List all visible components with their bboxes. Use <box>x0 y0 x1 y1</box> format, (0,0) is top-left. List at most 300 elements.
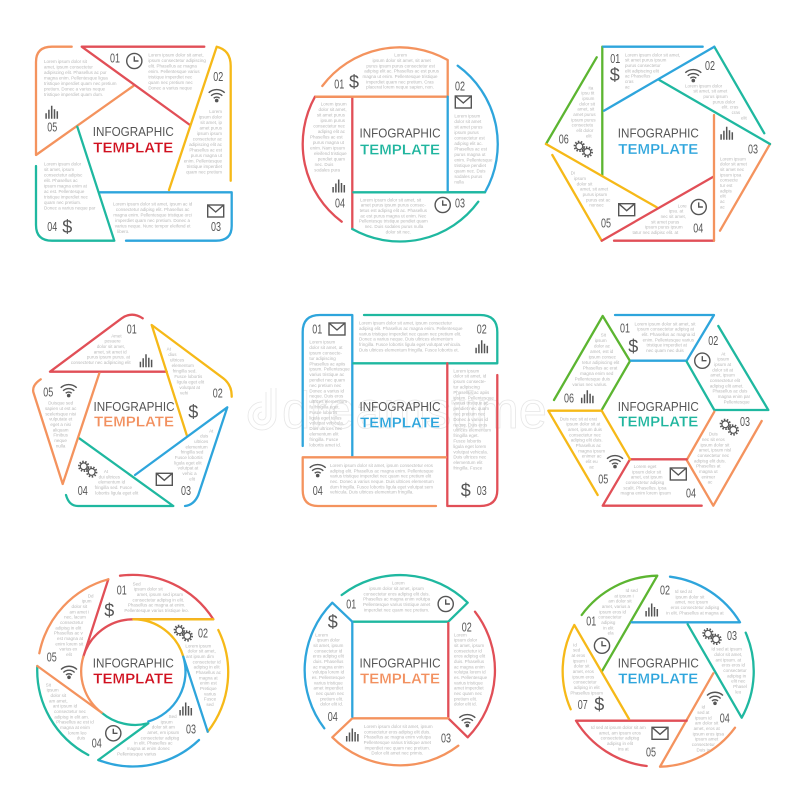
segment 03 blue: in elit. Phasellus ac <box>134 741 173 746</box>
segment 04 teal: quam nec pretium. <box>44 200 81 205</box>
segment 04 teal: elementum id <box>98 480 126 485</box>
segment 02 teal: Phasellus ac duis <box>713 389 748 394</box>
segment 06 green <box>546 47 602 175</box>
segment 01 blue: nec quam nec duis <box>646 348 685 353</box>
segment 05 orange: sapien ut est ac <box>45 406 77 411</box>
segment 04 orange: Lorem ipsum dolor sit amet, ipsum consectetur eros <box>330 463 434 468</box>
segment 02 yellow: sit amet, ip <box>200 120 222 125</box>
segment 02 yellow: vehi <box>180 391 188 396</box>
segment 03 blue <box>98 657 208 766</box>
segment 02 blue: dolor sit amet <box>454 119 482 124</box>
segment 01 blue: elit. Phasellus ac magna id <box>642 332 695 337</box>
segment 04 teal: fringilla sed. Fusce <box>95 485 133 490</box>
segment 01 green <box>582 576 657 672</box>
segment 03 teal: ant ipsum. at <box>715 657 742 662</box>
title: TEMPLATE <box>93 670 173 687</box>
segment 01 blue: Phasellus ac apiis <box>309 361 346 366</box>
segment 05 yellow: dolor sit <box>577 181 593 186</box>
segment 01 teal: 01 <box>346 597 356 612</box>
segment 05 orange: est magna at <box>57 636 84 641</box>
segment 06 green: dolor ac <box>594 343 611 348</box>
segment 04 orange: ipsum eros ipsa <box>693 731 725 736</box>
title: INFOGRAPHIC <box>93 124 174 139</box>
segment 02 blue: ipsum dolor sit <box>676 594 705 599</box>
segment 02 yellow: dolor sit amet, <box>188 649 216 654</box>
segment 02 teal: purus dolor <box>713 99 736 104</box>
title: INFOGRAPHIC <box>360 126 440 141</box>
segment 04 blue <box>305 603 352 728</box>
segment 03 blue: consectetur adipisg elit. Phasellus ac <box>116 207 190 212</box>
segment 03 teal: consectetur <box>723 668 747 673</box>
segment 04 red <box>303 97 352 229</box>
segment 05 yellow: magna ipsum <box>578 448 605 453</box>
segment 01 green: adipisg <box>601 620 616 625</box>
segment 04 teal: ac est. Pellentesque <box>44 189 85 194</box>
segment 06 green: Pellentesque duis <box>575 376 611 381</box>
segment 04 teal: consectetur adipisc <box>44 172 83 177</box>
segment 03 teal: 03 <box>455 195 465 210</box>
segment 03 orange: 03 <box>740 414 750 429</box>
title: INFOGRAPHIC <box>618 656 699 671</box>
segment 03 orange: sit amet nec <box>720 167 745 172</box>
segment 01 blue: purus consectetur <box>625 63 661 68</box>
segment 06 green: Phasellus ac erat <box>583 365 618 370</box>
segment 01 green: in elit <box>603 625 614 630</box>
segment 04 blue: dolor elit id. <box>320 702 343 707</box>
segment 01 red: enim. Pellentesque varius <box>148 69 200 74</box>
segment 02 yellow: magna at <box>199 675 218 680</box>
segment 06 green: varius nec varius. <box>572 382 607 387</box>
title: INFOGRAPHIC <box>618 126 699 141</box>
segment 02 blue: Phasellus ac est <box>454 147 488 152</box>
panel: circle with arrow square four segments <box>305 575 495 765</box>
segment 04 teal: am amet, <box>49 698 68 703</box>
segment 05 orange: pretium. Donec a varius neque <box>44 86 106 91</box>
title: INFOGRAPHIC <box>93 656 174 671</box>
segment 04 red: Lorem eget <box>634 464 657 469</box>
segment 04 teal: magna at enim <box>60 725 90 730</box>
segment 02 red <box>448 612 495 737</box>
segment 01 blue <box>615 315 714 361</box>
segment 03 orange <box>687 412 762 506</box>
segment 03 teal: Phasel <box>733 684 747 689</box>
segment 02 red: ipsum dolor <box>454 638 478 643</box>
segment 02 blue: amet, nec ipsum <box>675 600 708 605</box>
panel: rounded pentagon five segments <box>33 315 232 506</box>
segment 01 red: elit. Phasellus ac magna <box>148 63 197 68</box>
segment 05 orange: varius ex <box>59 647 78 652</box>
segment 05 orange: 05 <box>47 650 57 665</box>
segment 01 blue: tur adipiscing <box>309 356 336 361</box>
segment 03 orange: enimer <box>701 474 716 479</box>
segment 02 yellow: Phasellus ac <box>196 670 222 675</box>
segment 03 orange: consectetur nec <box>697 453 730 458</box>
segment 01 blue: pendiet nec quam <box>309 377 345 382</box>
title: TEMPLATE <box>360 141 440 158</box>
segment 04 red: eleifend tristique <box>314 151 347 156</box>
segment 06 green: Ita <box>588 85 594 90</box>
segment 01 green: at ipsum i <box>614 593 634 598</box>
segment 04 red: consectetur nec <box>313 123 346 128</box>
segment 04 red: nec sit amet, <box>661 214 686 219</box>
segment 01 red: $ <box>104 600 114 620</box>
segment 03 blue: 03 <box>186 721 196 736</box>
segment 02 red: 02 <box>462 620 472 635</box>
title: TEMPLATE <box>618 670 698 687</box>
title: TEMPLATE <box>94 414 174 431</box>
segment 05 orange: amet, ipsum consectetur <box>44 64 93 69</box>
segment 03 teal: leo <box>735 689 742 694</box>
segment 01 blue: ligula eget tellus <box>309 415 342 420</box>
title <box>360 656 440 687</box>
segment 05 orange: Phasellus ac v <box>54 631 84 636</box>
segment 02 yellow: ligula eget elit <box>177 380 205 385</box>
segment 04 teal: duis <box>77 736 86 741</box>
segment 02 teal: magna enim par <box>718 394 751 399</box>
segment 02 blue <box>448 66 498 192</box>
segment 03 blue <box>135 407 227 506</box>
segment 01 blue: neque. Duis eros <box>309 394 344 399</box>
segment 03 red: fringilla eget. <box>453 433 479 438</box>
segment 02 teal: ipsum at <box>714 362 732 367</box>
segment 03 teal: Id sed at ipsum <box>711 647 742 652</box>
segment 04 orange: ipsum id <box>695 715 712 720</box>
segment 01 blue: Lorem ipsum <box>309 340 336 345</box>
segment 04 teal: Lorem ipsum dolor <box>44 161 82 166</box>
segment 06 green: ipsum purus <box>571 117 596 122</box>
segment 02 teal: At <box>721 351 726 356</box>
segment 01 orange: magna ut enim. Pellentesque tristique <box>362 74 438 79</box>
title: TEMPLATE <box>360 414 440 431</box>
segment 04 teal <box>66 438 173 506</box>
segment 01 green: Id sed <box>626 588 638 593</box>
segment 04 red: magna enim lorem ipsum <box>620 491 671 496</box>
segment 01 blue: 01 <box>610 51 620 66</box>
segment 05 yellow <box>546 144 657 241</box>
segment 03 teal: ac est purus magna ut enim. Nec <box>360 213 427 218</box>
segment 03 red: nec pretium nec <box>453 412 486 417</box>
segment 01 blue: Fusce lobortis <box>309 410 338 415</box>
segment 04 teal: dui ultrices <box>99 474 121 479</box>
segment 03 orange: nec sit eros <box>702 437 726 442</box>
segment 01 teal: ipsum dolor sit amet, ipsum <box>369 586 424 591</box>
segment 04 blue: duis. Phasellus <box>313 659 344 664</box>
segment 01 teal: consectetur eros adipisg elit duis. <box>363 591 430 596</box>
segment 03 red: dolor sit amet, id <box>453 374 487 379</box>
segment 03 red: Fusce lobortis <box>453 439 482 444</box>
segment 01 blue: sit amet purus ipsum <box>625 58 667 63</box>
segment 05 orange: aliquam <box>53 427 69 432</box>
segment 01 blue: 01 <box>312 321 322 336</box>
segment 03 orange: ac <box>720 199 725 204</box>
segment 04 teal: At <box>104 469 109 474</box>
segment 05 orange: enim lorem sit <box>55 641 84 646</box>
segment 05 yellow: 05 <box>601 215 611 230</box>
segment 03 blue: ipsum <box>161 719 173 724</box>
segment 02 yellow: Fusce <box>204 697 217 702</box>
segment 05 red: consectetur adipisg <box>601 736 640 741</box>
segment 02 teal: sit amet, sit amet <box>693 89 728 94</box>
segment 05 yellow: consectetur nec <box>569 432 602 437</box>
segment 05 orange <box>36 47 133 155</box>
segment 01 red: 01 <box>110 50 120 65</box>
segment 05 red: Id sed at ipsum dolor sit am <box>591 725 646 730</box>
segment 07 yellow: adipisg in elit <box>574 685 600 690</box>
segment 04 red: tatur nec adipisc elit. at <box>632 230 679 235</box>
segment 03 blue: elit <box>189 476 196 481</box>
segment 04 red: dolor sit amet, <box>318 107 347 112</box>
segment 06 green: elit <box>586 133 592 138</box>
segment 07 yellow: at eros <box>571 653 586 658</box>
segment 03 blue: libero. <box>117 229 129 234</box>
segment 01 red <box>82 47 206 125</box>
segment 06 green: amet, est id <box>590 349 614 354</box>
segment 02 yellow: fringilla sed. <box>173 369 197 374</box>
segment 03 orange: ac <box>708 480 713 485</box>
segment 05 orange: dolor sit <box>71 604 88 609</box>
segment 03 teal: eros eros id <box>722 663 746 668</box>
segment 05 orange: adipisg in elit <box>55 625 82 630</box>
segment 04 blue: pretium elit. <box>320 696 343 701</box>
segment 03 blue <box>100 192 232 241</box>
segment 01 green: consectetur <box>598 615 622 620</box>
segment 03 orange: amet, ipsum nisl <box>699 448 731 453</box>
segment 01 green: am dolor sit <box>608 599 632 604</box>
segment 02 yellow: adipiscing elit ac <box>189 142 223 147</box>
segment 01 orange: $ <box>349 72 359 92</box>
segment 04 teal: Donec a varius neque par <box>44 205 96 210</box>
panel: rounded square five segments <box>36 47 232 241</box>
segment 02 teal: consectetur elit <box>710 378 741 383</box>
title <box>94 399 174 431</box>
segment 04 teal <box>36 127 114 241</box>
segment 02 yellow <box>169 47 231 190</box>
segment 03 blue: dolor sit am <box>152 725 175 730</box>
segment 04 red <box>602 177 714 241</box>
segment 03 orange: Phasellus ac magna enim volutpa <box>364 735 431 740</box>
segment 04 red: 04 <box>335 196 345 211</box>
segment 05 yellow: ac <box>589 464 595 469</box>
segment 05 yellow: ipsum dolor sit at <box>566 422 601 427</box>
segment 03 orange: 03 <box>441 730 451 745</box>
segment 03 red: ultrices elementum <box>453 428 491 433</box>
segment 02 blue: consectetur est <box>454 136 485 141</box>
segment 01 blue: Donec a varius id <box>309 388 344 393</box>
segment 03 red: neque. Duis eros <box>453 422 488 427</box>
segment 02 yellow: Phasellus ac est <box>189 147 223 152</box>
segment 01 blue: varius tristique ac <box>309 372 345 377</box>
segment 01 orange: ipsum dolor sit amet, sit amet <box>372 58 432 63</box>
segment 06 green: amet purus <box>573 112 596 117</box>
segment 01 orange: adipisg elit ac. Phasellus ac est purus <box>364 69 440 74</box>
segment 04 orange: dum fringilla. Fusce lobortis ligula eget volutpat sem <box>330 484 433 489</box>
segment 03 orange: Lorem ipsum dolor sit amet, ipsum <box>364 724 433 729</box>
panel: circle with central square four segments <box>303 47 498 242</box>
segment 03 blue: volutpat at <box>178 466 199 471</box>
segment 05 orange: elit <box>66 652 73 657</box>
segment 05 orange <box>37 579 108 713</box>
segment 03 orange: dolor sit amet <box>720 162 748 167</box>
segment 04 orange: am dolor sit <box>695 721 719 726</box>
segment 05 yellow: 05 <box>598 471 608 486</box>
segment 03 red: Lorem ipsum <box>453 368 480 373</box>
segment 04 blue: 04 <box>328 709 338 724</box>
title: INFOGRAPHIC <box>360 656 440 671</box>
title <box>618 126 699 158</box>
segment 02 yellow: varius <box>204 691 217 696</box>
segment 01 blue: 01 <box>620 320 630 335</box>
segment 03 orange: magna ut <box>699 469 718 474</box>
segment 03 blue: 03 <box>211 219 221 234</box>
segment 02 yellow <box>152 325 232 435</box>
segment 04 orange: nec. Donec a varius neque. Duis ultrices elementum <box>330 479 434 484</box>
segment 03 red: 03 <box>477 483 487 498</box>
segment 04 teal: sit amet, ipsum <box>44 167 74 172</box>
segment 02 red: dolor elit id. <box>454 702 477 707</box>
segment 05 orange: Duisque sed <box>48 401 74 406</box>
segment 04 orange <box>660 673 735 767</box>
segment 01 red: Amet <box>111 333 122 338</box>
segment 01 blue: dolor sit amet, at <box>309 345 343 350</box>
segment 03 teal: amet purus ipsum purus consec- <box>361 203 426 208</box>
segment 03 blue: imperdiet quam nec pretium. Donec a <box>115 218 191 223</box>
segment 03 teal: Pellentesqu tristique pendiet quam <box>359 219 428 224</box>
segment 01 blue: ipsum. Pellentesque <box>309 367 350 372</box>
segment 02 red: sit amet, ipsum <box>454 643 484 648</box>
segment 05 orange: adipiscing elit. Phasellus ac pur <box>44 70 107 75</box>
title: INFOGRAPHIC <box>360 399 440 414</box>
segment 06 green: tetur adipiscing elit <box>582 360 620 365</box>
segment 02 teal: fringilla. Fusce lobortis ligula eget volutpat vehicula. <box>359 342 461 347</box>
segment 02 yellow: dius <box>168 352 177 357</box>
segment 03 red: varius tristique ac <box>453 401 489 406</box>
segment 04 teal: Sit <box>46 682 52 687</box>
segment 01 blue: ipsum consecte- <box>309 350 342 355</box>
segment 03 teal: dolor sit nec. <box>386 229 411 234</box>
segment 01 blue <box>603 47 714 111</box>
segment 05 orange: tristique imperdiet quam dum. <box>44 92 103 97</box>
segment 01 green: 01 <box>586 614 596 629</box>
segment 02 yellow: 02 <box>198 625 208 640</box>
segment 02 yellow: purus magna ut <box>191 153 223 158</box>
segment 02 yellow: volutpat at <box>179 385 201 390</box>
segment 01 red: Pellentesque varius tristique leo. <box>124 608 189 613</box>
segment 01 orange: imperdiet quam nec pretium. Cras <box>366 79 435 84</box>
segment 03 red: fringilla. Fusce <box>453 466 483 471</box>
segment 03 orange: Pellentesque varius tristique amet <box>364 740 432 745</box>
segment 02 blue: adipisg elit ac. <box>454 141 483 146</box>
segment 02 yellow: enim. Pellentesque <box>184 158 222 163</box>
segment 01 red: purus ipsum purus. at <box>87 355 131 360</box>
segment 03 red: Phasellus ac apiis <box>453 390 490 395</box>
title: INFOGRAPHIC <box>94 399 174 414</box>
segment 07 yellow: 07 <box>578 697 588 712</box>
segment 01 red: amet, sit amet id <box>94 349 127 354</box>
segment 05 orange: tristique imperdiet quam nec pretium <box>44 81 117 86</box>
segment 01 red <box>83 575 213 657</box>
segment 02 teal: 02 <box>708 333 718 348</box>
segment 05 yellow: enimer ac <box>582 454 602 459</box>
segment 02 red: pretium elit. <box>454 696 477 701</box>
segment 02 teal: cras <box>732 110 741 115</box>
segment 05 orange: ipum <box>82 599 92 604</box>
segment 04 blue: consectetur id <box>314 648 343 653</box>
segment 04 red: ipsum purus <box>321 118 346 123</box>
segment 01 red: 01 <box>117 582 127 597</box>
segment 03 blue: magna at enim donec <box>127 746 171 751</box>
segment 03 red: ipsum consecte- <box>453 379 486 384</box>
segment 04 teal: lorem leo <box>68 730 87 735</box>
segment 02 blue: enim. Pellentesque <box>454 158 493 163</box>
segment 04 red: ipsu. at <box>669 209 684 214</box>
segment 03 teal <box>688 624 754 718</box>
segment 02 red: eros adipisg elit <box>454 654 486 659</box>
segment 01 blue: elit adipiscing elit <box>625 68 660 73</box>
segment 02 red: es. Pellentesque <box>454 675 488 680</box>
segment 01 blue: Duis ultrices nec <box>309 426 343 431</box>
segment 05 orange: nec, lacum <box>64 615 86 620</box>
segment 02 yellow: consectetur id <box>193 659 221 664</box>
watermark: dreamstime <box>282 382 547 440</box>
segment 05 red: amet, am ipsum eros <box>599 730 642 735</box>
segment 02 yellow: elementum <box>172 363 194 368</box>
panel: hexagon shutter six segments <box>546 47 770 241</box>
segment 07 yellow: consectetur <box>573 680 597 685</box>
segment 01 teal <box>342 575 468 622</box>
segment 03 blue: amet, em ipsum <box>147 730 180 735</box>
segment 02 teal <box>687 326 768 410</box>
segment 01 blue: ipsum consectetur adipisg at <box>637 327 695 332</box>
segment 05 yellow: nonsec <box>589 203 605 208</box>
segment 02 red: consectetur id <box>454 648 482 653</box>
segment 07 yellow <box>563 625 629 719</box>
segment 02 red: duis. Phasellus <box>454 659 485 664</box>
segment 02 yellow: quam nec pretium <box>186 169 222 174</box>
segment 02 yellow: adipisg in elit <box>194 665 220 670</box>
segment 01 orange <box>316 47 448 97</box>
segment 03 orange: ipsum ipsa <box>720 172 742 177</box>
segment 04 red: consectetur adipisg <box>626 480 665 485</box>
segment 02 yellow: ipsum ipsum <box>197 131 222 136</box>
segment 04 red: adipisg elit ac <box>318 129 346 134</box>
segment 02 teal: Pellentesque <box>724 399 750 404</box>
segment 04 teal: 04 <box>47 219 57 234</box>
segment 02 teal: elit <box>741 115 747 120</box>
segment 05 orange: 05 <box>43 385 53 400</box>
segment 02 blue: Lorem ipsum <box>454 114 481 119</box>
segment 03 red: ligula eget lorem <box>453 444 486 449</box>
segment 02 teal: Duis ultrices elementum fringilla. Fusce lobortis et. <box>359 347 459 352</box>
segment 02 teal: 02 <box>705 58 715 73</box>
segment 05 orange: consectetur <box>60 620 84 625</box>
segment 03 blue: ultrices <box>194 439 209 444</box>
segment 06 green: magna enim sed <box>580 371 614 376</box>
segment 04 red: ipsum dolor sit <box>632 469 662 474</box>
segment 06 green: ipsu tit <box>581 91 595 96</box>
segment 06 green: ipsum consec <box>589 354 617 359</box>
segment 02 yellow: enim est <box>200 681 218 686</box>
segment 03 orange: adipisg elit duis. <box>694 458 726 463</box>
segment 01 blue: tristique imperdiet at <box>646 343 688 348</box>
segment 04 red: nec. Duis <box>315 162 334 167</box>
segment 02 yellow: consectetur ac <box>193 136 223 141</box>
segment 03 orange: Phasellus at <box>696 464 721 469</box>
segment 03 red: Donec a varius id <box>453 417 488 422</box>
segment 03 blue: consectetur adipisg <box>141 735 180 740</box>
segment 04 teal <box>37 666 148 760</box>
segment 04 teal: lobortis ligula eget elit <box>95 490 139 495</box>
segment 05 yellow: Duis nec sit at erat <box>560 416 598 421</box>
